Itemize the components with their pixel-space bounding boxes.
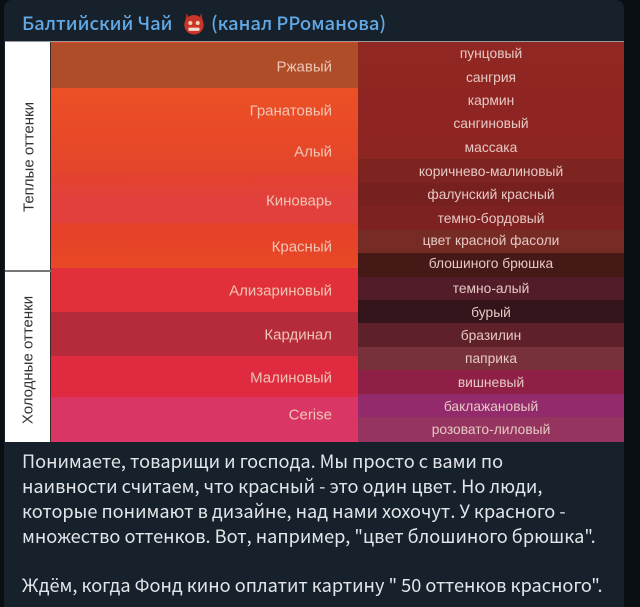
band: Ализариновый [51, 268, 359, 312]
panel: main shades [51, 42, 359, 442]
line 1: Понимаете, товарищи и господа. Мы просто с вами по [22, 448, 503, 474]
band: Кардинал: Кардинал [264, 326, 332, 344]
row: фалунский красный: фалунский красный [427, 187, 555, 202]
row: баклажановый: баклажановый [444, 399, 538, 414]
row: массака [358, 136, 624, 160]
row: бразилин [358, 323, 624, 347]
band: Красный [51, 223, 359, 268]
line 2: наивности считаем, что красный - это один цвет. Но люди, [22, 473, 542, 499]
row: сангрия [358, 65, 624, 89]
row: бразилин: бразилин [461, 328, 521, 343]
band: Алый: Алый [294, 144, 332, 161]
channel name suffix: (канал РРоманова) [211, 10, 386, 36]
band: Алый [51, 132, 359, 172]
label: warm shades: Теплые оттенки [20, 102, 38, 212]
header: channel title [22, 10, 386, 36]
row: темно-алый: темно-алый [453, 281, 529, 296]
row: пунцовый [358, 42, 624, 66]
row: темно-бордовый [358, 206, 624, 230]
divider between warm and cool [5, 270, 51, 272]
row: блошиного брюшка [358, 253, 624, 277]
band: Малиновый: Малиновый [250, 369, 332, 386]
panel: temperature axis [5, 42, 51, 442]
band: Малиновый [51, 356, 359, 397]
row: вишневый [358, 370, 624, 394]
row: сангрия: сангрия [466, 70, 516, 85]
row: кармин: кармин [468, 93, 514, 108]
band: Ализариновый: Ализариновый [229, 282, 332, 300]
row: бурый [358, 300, 624, 324]
band: Cerise [51, 397, 359, 442]
row: паприка [358, 347, 624, 371]
row: сангиновый [358, 112, 624, 136]
row: паприка: паприка [465, 351, 517, 366]
icon: red ogre emoji [184, 13, 204, 34]
chart: shades of red table [5, 41, 624, 442]
row: цвет красной фасоли: цвет красной фасоли [423, 233, 559, 248]
channel name: Балтийский Чай [22, 10, 173, 36]
row: розовато-лиловый [358, 417, 624, 442]
band: Киноварь: Киноварь [266, 192, 332, 209]
line 5: Ждём, когда Фонд кино оплатит картину " 50 оттенков красного". [22, 572, 603, 598]
row: цвет красной фасоли [358, 230, 624, 254]
row: баклажановый [358, 394, 624, 418]
band: Cerise: Cerise [289, 407, 332, 424]
label: cool shades: Холодные оттенки [20, 296, 36, 424]
panel: detailed shades [358, 42, 624, 442]
line 4: множество оттенков. Вот, например, "цвет блошиного брюшка". [22, 523, 596, 549]
text block: message body [22, 448, 603, 598]
line 3: которые понимают в дизайне, над нами хохочут. У красного - [22, 498, 566, 524]
row: темно-алый [358, 277, 624, 301]
band: Киноварь [51, 172, 359, 223]
row: пунцовый: пунцовый [460, 46, 522, 61]
band: Кардинал [51, 312, 359, 356]
row: массака: массака [465, 140, 517, 155]
row: вишневый: вишневый [458, 375, 524, 390]
row: сангиновый: сангиновый [453, 116, 529, 131]
band: Красный: Красный [272, 238, 332, 255]
row: темно-бордовый: темно-бордовый [438, 211, 544, 226]
row: кармин [358, 89, 624, 113]
row: фалунский красный [358, 183, 624, 207]
band: Ржавый [51, 43, 359, 88]
row: розовато-лиловый: розовато-лиловый [432, 422, 550, 437]
band: Гранатовый: Гранатовый [250, 102, 332, 120]
band: Гранатовый [51, 88, 359, 132]
row: коричнево-малиновый [358, 159, 624, 183]
row: бурый: бурый [471, 305, 511, 320]
row: блошиного брюшка: блошиного брюшка [429, 256, 553, 271]
band: Ржавый: Ржавый [276, 58, 332, 75]
row: коричнево-малиновый: коричнево-малиновый [419, 164, 563, 179]
